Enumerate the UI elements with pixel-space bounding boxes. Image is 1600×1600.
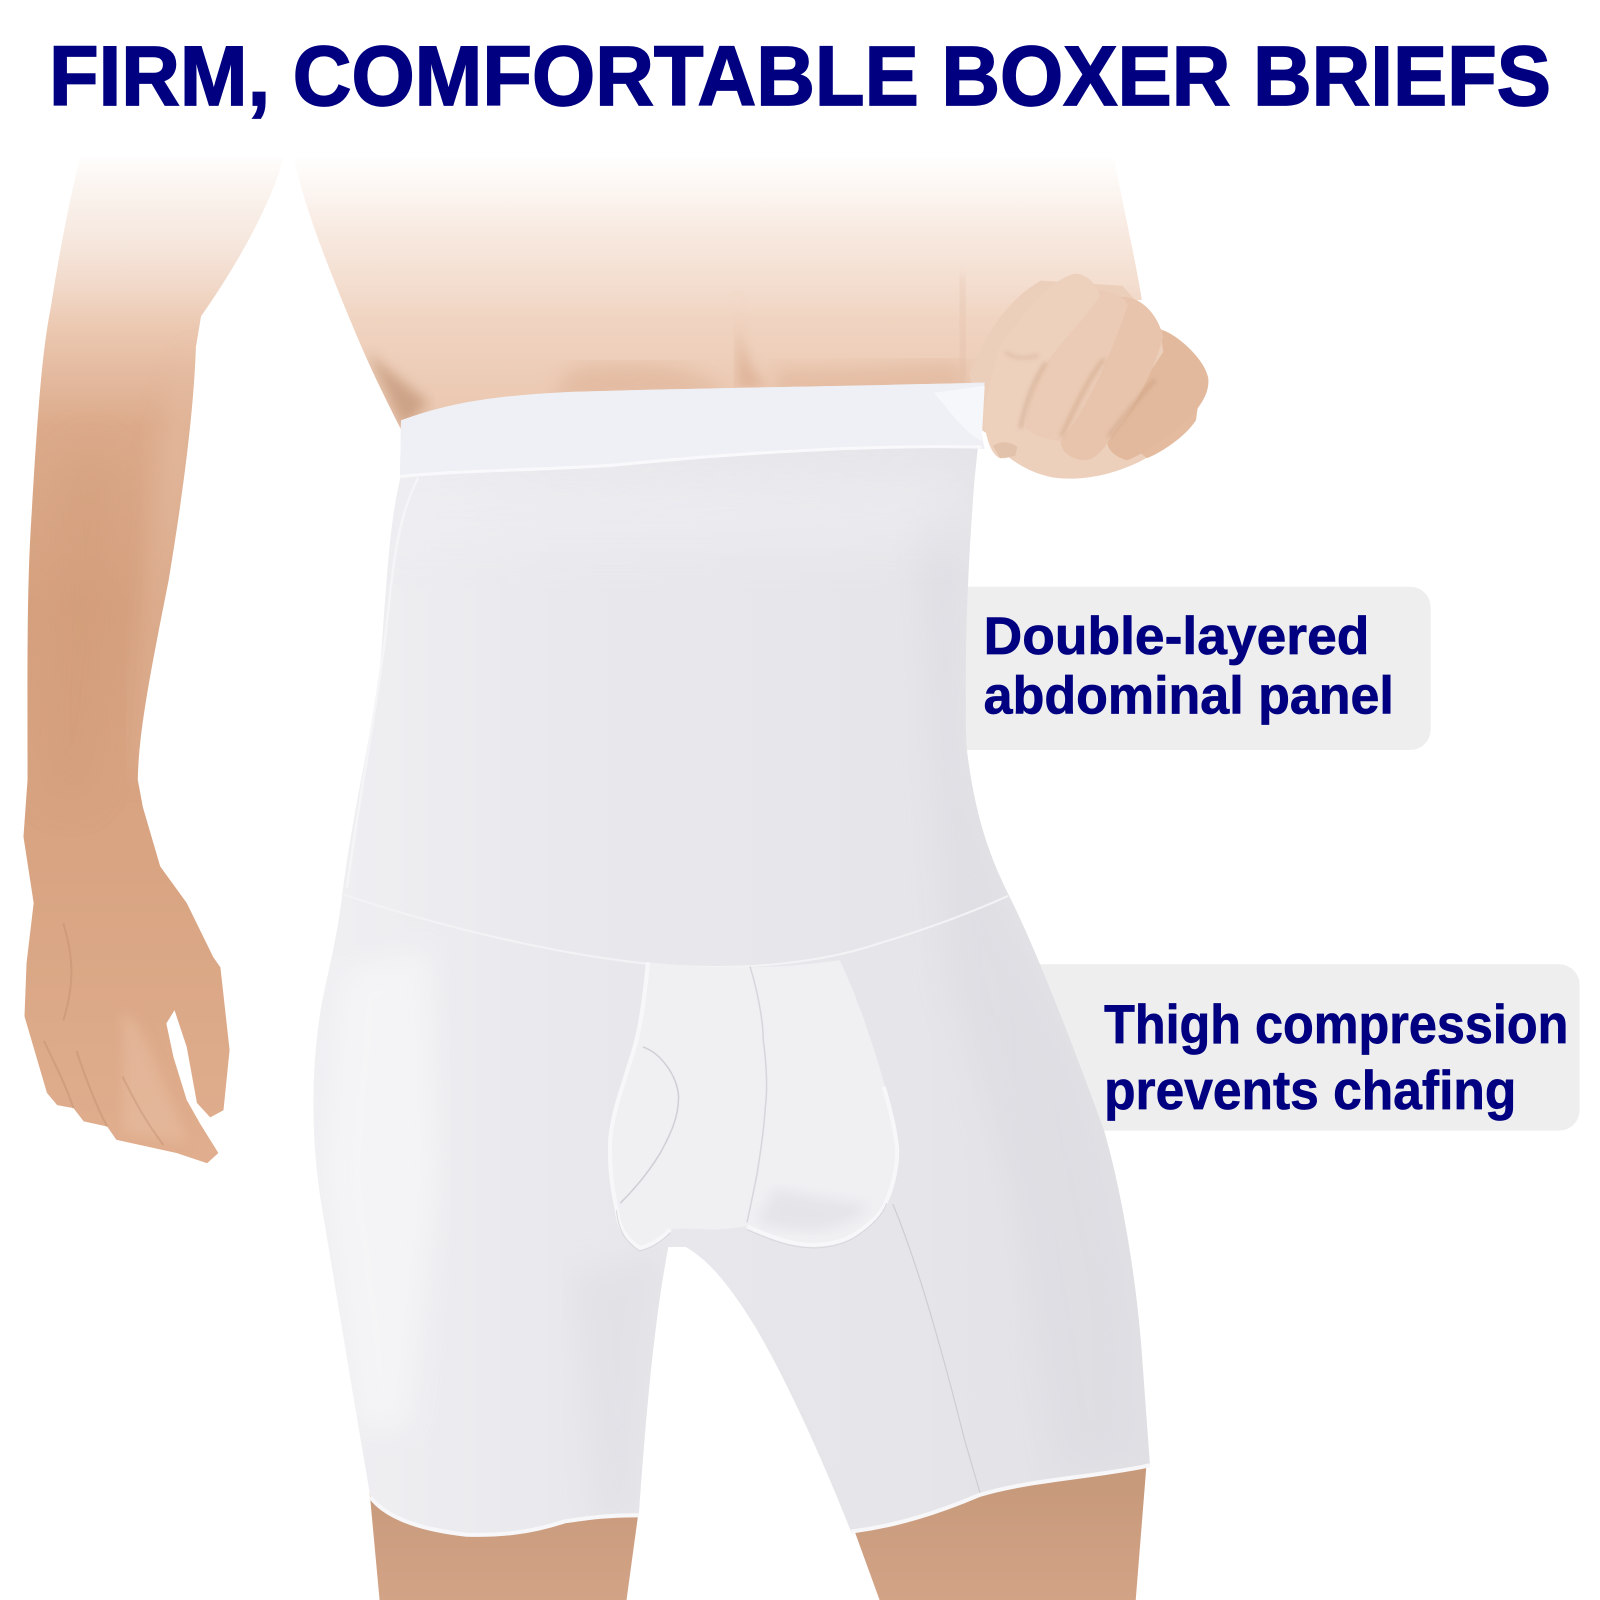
ring finger xyxy=(1061,297,1163,460)
thigh seam xyxy=(893,1204,981,1495)
left arm and hand xyxy=(23,158,284,1163)
title: FIRM, COMFORTABLE BOXER BRIEFS xyxy=(49,28,1551,123)
pouch stitching xyxy=(610,962,897,1248)
side seam xyxy=(347,478,418,888)
pinky xyxy=(1122,406,1198,458)
waistband stitching xyxy=(400,447,982,477)
pouch centre seam xyxy=(747,966,767,1222)
callout text: double-layered abdominal panel xyxy=(984,607,1394,725)
boxer briefs body xyxy=(313,383,1150,1535)
callout text: double-layered abdominal panel: Double-layered xyxy=(984,607,1369,666)
hem stitching xyxy=(370,1465,1150,1535)
thumb xyxy=(984,273,1100,458)
middle finger xyxy=(1026,289,1128,441)
callout text: thigh compression xyxy=(1104,993,1568,1121)
left leg xyxy=(369,1490,639,1600)
palm under fingers xyxy=(984,388,1197,479)
photo: man wearing white boxer briefs xyxy=(23,158,1208,1600)
torso and raised arm skin xyxy=(294,158,1142,434)
finger shadows xyxy=(1005,352,1155,437)
pouch stitch edge xyxy=(616,1203,887,1251)
callout text: thigh compression: prevents chafing xyxy=(1104,1059,1516,1121)
raised hand gripping waistband xyxy=(969,273,1208,479)
knuckle and finger creases xyxy=(44,923,163,1145)
front pouch xyxy=(610,960,897,1248)
back of hand base xyxy=(969,281,1196,449)
right leg xyxy=(847,1459,1147,1600)
pouch underside shadow xyxy=(757,1189,867,1231)
thumb knuckle and nail xyxy=(993,442,1017,458)
callout text: double-layered abdominal panel: abdominal panel xyxy=(984,666,1394,725)
callout: double-layered abdominal panel background xyxy=(918,587,1431,750)
callout text: thigh compression: Thigh compression xyxy=(1104,993,1568,1055)
callout: thigh compression background xyxy=(980,964,1580,1131)
abdominal shading xyxy=(367,276,965,429)
waistband fold xyxy=(934,386,985,441)
waistband xyxy=(400,383,985,478)
little finger xyxy=(1107,330,1208,460)
pouch fly opening xyxy=(620,1047,679,1203)
fabric shading xyxy=(324,469,1133,1531)
arm shading xyxy=(124,410,191,1136)
hip panel seam xyxy=(342,894,1008,967)
